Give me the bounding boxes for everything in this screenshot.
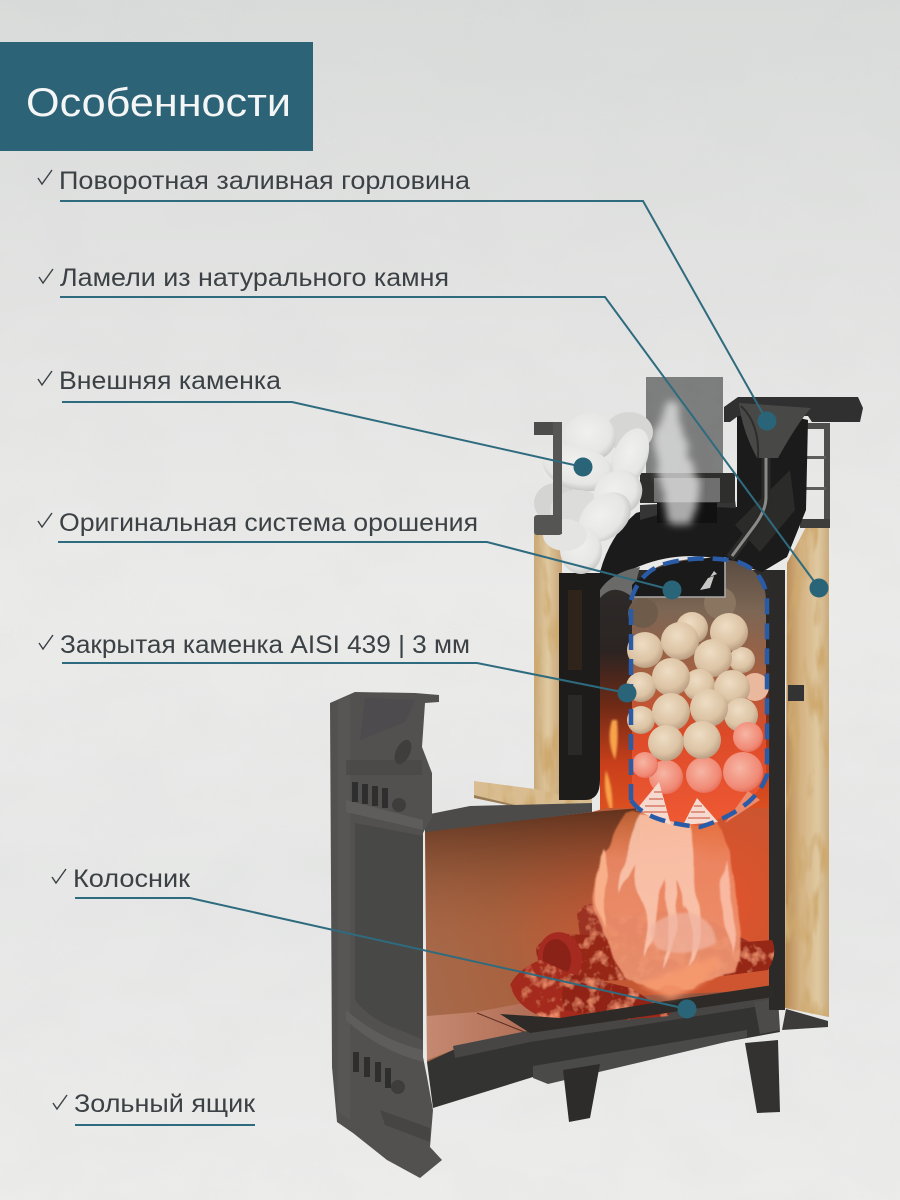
red hot shaft: [600, 570, 778, 840]
right dark rail: [769, 570, 785, 1010]
upper vent slots: [352, 782, 388, 808]
stove cutaway illustration: [330, 377, 863, 1178]
white stones: [534, 412, 657, 574]
funnel cap: [724, 397, 863, 458]
door handle details: [392, 798, 406, 812]
callout: stone slats: [60, 297, 828, 598]
callout: ash box underline: [75, 1124, 255, 1126]
callout: closed chamber: [62, 663, 636, 702]
chamber interior: [632, 558, 766, 826]
dashed chamber outline: [631, 558, 767, 827]
label: ash box: Зольный ящик: [74, 1090, 256, 1118]
firebox roof plate: [425, 803, 592, 832]
label: stone slats: Ламели из натурального камня: [60, 264, 449, 292]
label: external stones: Внешняя каменка: [59, 367, 281, 395]
left stone tray: [534, 422, 562, 535]
right wood panel: [782, 527, 829, 1030]
label: grate: Колосник: [73, 865, 191, 893]
ceramic pyramids: [636, 782, 760, 825]
title banner: Особенности: [26, 81, 291, 125]
firebox interior: [425, 803, 778, 1062]
dark dome and water tank: [600, 403, 808, 598]
lower vent slots: [353, 1052, 391, 1088]
legs: [563, 1040, 780, 1122]
callout: irrigation: [58, 542, 682, 600]
title banner: [0, 42, 313, 151]
ceramic balls: [626, 587, 769, 794]
grate: [500, 985, 773, 1033]
chimney pipe with steam: [640, 377, 735, 527]
closed stone chamber: [626, 556, 769, 827]
flames: [596, 808, 740, 999]
door inner panel: [355, 823, 423, 1040]
callout: grate: [75, 898, 696, 1018]
feature labels: [38, 167, 478, 1118]
callout: filler neck: [60, 201, 776, 430]
ash pan and base: [427, 995, 780, 1108]
callout: external stones: [62, 402, 592, 476]
logs: [510, 904, 774, 1024]
label: closed chamber: Закрытая каменка AISI 439 | 3 мм: [60, 631, 470, 659]
right grille: [800, 423, 830, 528]
label: irrigation: Оригинальная система орошения: [59, 509, 478, 537]
outer door: [330, 692, 442, 1178]
left wood panel: [474, 533, 592, 811]
irrigation box: [632, 556, 725, 597]
left inner dark wall: [559, 573, 600, 800]
label: filler neck: Поворотная заливная горловина: [59, 167, 470, 195]
callout lines and dots: [58, 201, 828, 1125]
water pipe: [730, 458, 766, 558]
